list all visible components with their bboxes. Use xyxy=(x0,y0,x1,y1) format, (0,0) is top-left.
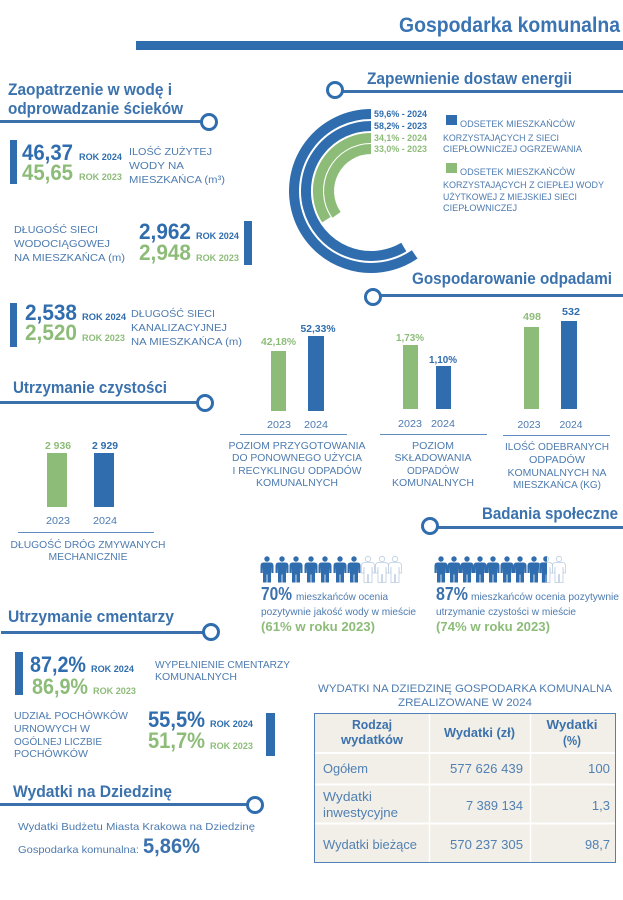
stat: cleanliness rating: mieszkańców ocenia pozytywnie xyxy=(471,591,619,603)
bar chart: recycling level: I RECYKLINGU ODPADÓW xyxy=(232,464,362,477)
heading: social research xyxy=(422,504,623,534)
stat: water use per resident: ROK 2024 xyxy=(79,152,123,163)
stat: water network length xyxy=(14,219,252,265)
stat: sewer network length: NA MIESZKAŃCA (m) xyxy=(131,335,242,348)
stat: cleanliness rating xyxy=(436,584,619,634)
bar chart: mechanically washed roads: 2023 xyxy=(46,516,70,527)
stat: water network length: 2,962 xyxy=(139,219,191,244)
heading: cemeteries: Utrzymanie cmentarzy xyxy=(8,607,174,626)
legend: ODSETEK MIESZKAŃCÓW xyxy=(460,167,575,178)
stat: budget share: Gospodarka komunalna: xyxy=(18,844,139,856)
title xyxy=(136,14,623,50)
stat: cemetery occupancy: 87,2% xyxy=(30,652,86,677)
table row: investment xyxy=(323,789,610,820)
stat: urn burial share xyxy=(14,707,275,760)
stat: water use per resident: ROK 2023 xyxy=(79,172,122,183)
table row: current: Wydatki bieżące xyxy=(323,837,417,852)
bar chart: mechanically washed roads: 2 936 xyxy=(45,441,71,452)
legend: ODSETEK MIESZKAŃCÓW xyxy=(460,119,575,130)
stat: cemetery occupancy: ROK 2024 xyxy=(91,664,135,675)
legend: CIEPŁOWNICZEJ xyxy=(443,203,517,214)
panel: cemetery maintenance xyxy=(1,607,290,760)
stat: water quality rating: pozytywnie jakość wody w mieście xyxy=(261,606,416,618)
stat: cemetery occupancy: ROK 2023 xyxy=(93,686,136,697)
stat: water use per resident xyxy=(10,140,225,186)
stat: sewer network length: DŁUGOŚĆ SIECI xyxy=(131,307,215,320)
chart value labels: 34,1% - 2024 xyxy=(374,133,428,144)
chart value labels: 33,0% - 2023 xyxy=(374,144,427,155)
legend: KORZYSTAJĄCYCH Z SIECI xyxy=(443,133,559,144)
table header: Wydatki (zł) xyxy=(444,726,515,740)
bar chart: mechanically washed roads: 2024 xyxy=(93,516,117,527)
stat: water use per resident: 46,37 xyxy=(22,140,73,165)
table title: WYDATKI NA DZIEDZINĘ GOSPODARKA KOMUNALNA xyxy=(318,683,613,695)
stat: sewer network length: 2,520 xyxy=(25,320,77,345)
bar chart: recycling level: 42,18% xyxy=(261,336,297,348)
bar chart: landfill level: ODPADÓW xyxy=(407,464,460,477)
heading: water supply: odprowadzanie ścieków xyxy=(8,99,184,118)
bar chart: collected waste per resident: 2023 xyxy=(518,420,541,431)
bar chart: mechanically washed roads: 2 929 xyxy=(92,441,118,452)
stat: cemetery occupancy xyxy=(15,652,290,699)
icon: people 87 percent xyxy=(434,556,566,582)
table row: current xyxy=(323,837,610,852)
bar chart: landfill level: 2023 xyxy=(398,419,422,430)
stat: water network length: NA MIESZKAŃCA (m) xyxy=(14,251,125,264)
stat: sewer network length: KANALIZACYJNEJ xyxy=(131,322,227,334)
stat: water quality rating: (61% w roku 2023) xyxy=(261,619,375,634)
bar chart: landfill level: 2024 xyxy=(431,419,455,430)
bar chart: mechanically washed roads xyxy=(10,441,166,563)
table row: total: 100 xyxy=(588,761,610,776)
bar chart: mechanically washed roads: DŁUGOŚĆ DRÓG ZMYWANYCH xyxy=(10,538,166,551)
stat: water quality rating: mieszkańców ocenia xyxy=(296,591,388,603)
stat: urn burial share: 51,7% xyxy=(148,728,205,753)
panel: water supply and sewage xyxy=(0,80,252,348)
stat: water network length: DŁUGOŚĆ SIECI xyxy=(14,223,98,236)
stat: water network length: 2,948 xyxy=(139,240,191,265)
stat: sewer network length: ROK 2023 xyxy=(82,333,125,344)
stat: cemetery occupancy: WYPEŁNIENIE CMENTARZY xyxy=(155,660,290,671)
bar chart: recycling level: KOMUNALNYCH xyxy=(256,478,338,489)
legend: UŻYTKOWEJ Z MIEJSKIEJ SIECI xyxy=(443,192,577,203)
stat: cemetery occupancy: 86,9% xyxy=(32,674,88,699)
radial chart xyxy=(294,114,415,268)
table row: investment: 7 389 134 xyxy=(466,798,523,813)
stat: urn burial share: 55,5% xyxy=(148,707,205,732)
heading: water supply: Zaopatrzenie w wodę i xyxy=(8,80,172,99)
chart value labels: 58,2% - 2023 xyxy=(374,121,427,132)
table row: current: 98,7 xyxy=(585,837,610,852)
bar chart: recycling level: 2023 xyxy=(267,420,291,431)
bar chart: collected waste per resident: MIESZKAŃCA (KG) xyxy=(513,478,601,491)
table header: wydatków xyxy=(340,733,403,747)
table header xyxy=(340,718,598,748)
heading: spending xyxy=(0,782,262,812)
stat: budget share: 5,86% xyxy=(143,835,200,858)
stat: sewer network length xyxy=(10,300,242,348)
stat: water network length: ROK 2023 xyxy=(196,253,239,264)
stat: sewer network length: ROK 2024 xyxy=(82,312,127,323)
table row: investment: inwestycyjne xyxy=(323,805,398,820)
bar chart: collected waste per resident: ILOŚĆ ODEBRANYCH xyxy=(505,440,609,453)
stat: cleanliness rating: 87% xyxy=(436,584,468,604)
stat: water quality rating xyxy=(261,584,416,634)
legend xyxy=(443,115,605,214)
panel: social research xyxy=(260,504,623,634)
stat: budget share: Wydatki Budżetu Miasta Krakowa na Dziedzinę xyxy=(18,821,255,833)
stat: cemetery occupancy: KOMUNALNYCH xyxy=(155,672,237,683)
bar chart: recycling level: POZIOM PRZYGOTOWANIA xyxy=(228,441,366,452)
table row: investment: Wydatki xyxy=(323,789,372,804)
stat: water network length: WODOCIĄGOWEJ xyxy=(14,238,110,250)
stat: water use per resident: MIESZKAŃCA (m³) xyxy=(129,173,225,186)
table header: (%) xyxy=(563,734,581,748)
bar chart: recycling level: 52,33% xyxy=(300,323,336,335)
bar chart: landfill level: 1,73% xyxy=(396,332,425,344)
bar chart: landfill level: POZIOM xyxy=(412,441,454,452)
heading: street cleaning: Utrzymanie czystości xyxy=(13,378,167,397)
table title xyxy=(318,683,613,709)
panel: street cleaning xyxy=(0,378,212,563)
table header: Wydatki xyxy=(546,718,598,732)
bar chart: collected waste per resident: 498 xyxy=(523,311,541,323)
stat: water use per resident: WODY NA xyxy=(129,160,184,172)
bar chart: recycling level xyxy=(228,323,366,489)
heading: cemeteries xyxy=(1,607,218,640)
table header: Rodzaj xyxy=(352,718,392,732)
chart value labels: 59,6% - 2024 xyxy=(374,109,428,120)
bar chart: collected waste per resident: 2024 xyxy=(560,420,583,431)
stat: urn burial share: POCHÓWKÓW xyxy=(14,747,89,760)
bar chart: collected waste per resident xyxy=(503,306,610,491)
panel: energy supply xyxy=(294,69,623,268)
table row: current: 570 237 305 xyxy=(450,837,523,852)
spending table xyxy=(314,714,616,862)
stat: urn burial share: ROK 2023 xyxy=(210,741,253,752)
icon: people 70 percent xyxy=(260,556,402,582)
stat: sewer network length: 2,538 xyxy=(25,300,77,325)
bar chart: landfill level: KOMUNALNYCH xyxy=(392,478,474,489)
table row: total xyxy=(323,761,610,776)
stat: water use per resident: ILOŚĆ ZUŻYTEJ xyxy=(129,145,212,158)
table row: total: Ogółem xyxy=(323,761,368,776)
table row: investment: 1,3 xyxy=(592,798,610,813)
stat: water network length: ROK 2024 xyxy=(196,231,240,242)
heading: water supply xyxy=(0,80,216,130)
chart value labels xyxy=(374,109,428,155)
heading: spending: Wydatki na Dziedzinę xyxy=(13,782,172,801)
panel: spending on the sector xyxy=(0,782,262,858)
panel: waste management xyxy=(228,269,623,491)
legend: CIEPŁOWNICZEJ OGRZEWANIA xyxy=(443,144,583,155)
heading: street cleaning xyxy=(0,378,212,410)
stat: urn burial share: URNOWYCH W xyxy=(14,724,91,735)
bar chart: landfill level: SKŁADOWANIA xyxy=(394,453,472,464)
table row: total: 577 626 439 xyxy=(450,761,523,776)
bar chart: recycling level: DO PONOWNEGO UŻYCIA xyxy=(232,451,362,464)
stat: urn burial share: OGÓLNEJ LICZBIE xyxy=(14,735,102,748)
heading: waste management xyxy=(366,269,623,304)
bar chart: collected waste per resident: ODPADÓW xyxy=(529,453,586,466)
stat: water use per resident: 45,65 xyxy=(22,160,73,185)
stat: water quality rating: 70% xyxy=(261,584,292,604)
stat: urn burial share: UDZIAŁ POCHÓWKÓW xyxy=(14,709,129,722)
bar chart: landfill level: 1,10% xyxy=(429,354,458,366)
legend: KORZYSTAJĄCYCH Z CIEPŁEJ WODY xyxy=(443,180,605,191)
stat: cleanliness rating: (74% w roku 2023) xyxy=(436,619,550,634)
heading: energy supply xyxy=(328,69,623,98)
stat: budget share xyxy=(18,821,255,858)
bar chart: recycling level: 2024 xyxy=(304,420,328,431)
stat: cleanliness rating: utrzymanie czystości w mieście xyxy=(436,606,576,618)
heading: energy supply: Zapewnienie dostaw energii xyxy=(367,69,572,88)
bar chart: mechanically washed roads: MECHANICZNIE xyxy=(48,552,128,563)
bar chart: collected waste per resident: 532 xyxy=(562,306,580,318)
stat: urn burial share: ROK 2024 xyxy=(210,719,254,730)
bar chart: landfill level xyxy=(380,332,487,489)
bar chart: collected waste per resident: KOMUNALNYCH NA xyxy=(508,468,607,479)
table title: ZREALIZOWANE W 2024 xyxy=(398,697,532,709)
